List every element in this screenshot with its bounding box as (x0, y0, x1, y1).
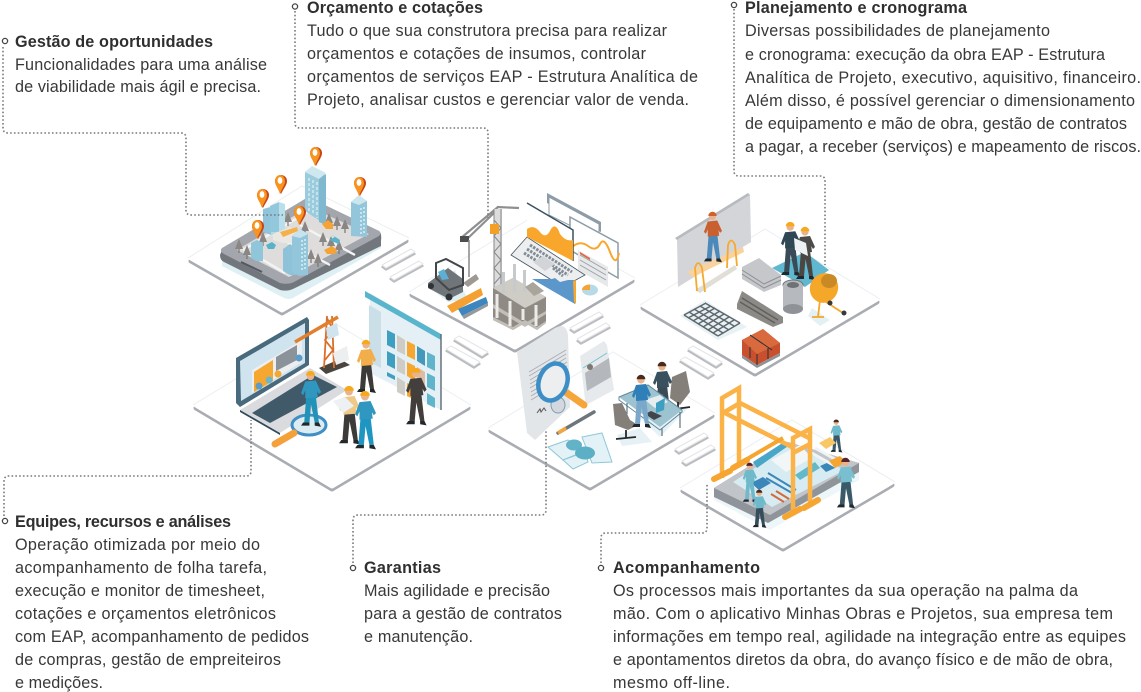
text block: acompanhamento: informações em tempo real, agilidade na integração entre as equipes (613, 628, 1126, 646)
connector: orçamento e cotações (292, 4, 488, 218)
text block: equipes, recursos e análises: com EAP, acompanhamento de pedidos (15, 628, 309, 646)
illustration: laptop, crane, calendar and workers (236, 291, 441, 449)
platform: gestão de oportunidades (188, 186, 409, 313)
text block: planejamento e cronograma: Diversas possibilidades de planejamento (745, 22, 1050, 40)
platform: acompanhamento (680, 420, 895, 549)
heading: garantias: Garantias (364, 559, 441, 577)
text block: garantias: Mais agilidade e precisão (364, 582, 550, 600)
text block: orçamento e cotações: Tudo o que sua construtora precisa para realizar (307, 22, 668, 40)
connector: garantias (350, 430, 546, 571)
illustration: phone with gantry and people (714, 388, 859, 530)
text block: acompanhamento: mesmo off-line. (613, 674, 730, 692)
text block: gestão de oportunidades (15, 33, 267, 96)
platform: orçamento e cotações (409, 219, 635, 350)
text block: planejamento e cronograma: de equipamento e mão de obra, gestão de contratos (745, 115, 1127, 133)
text block: planejamento e cronograma: e cronograma: execução da obra EAP - Estrutura (745, 46, 1105, 64)
platform: planejamento e cronograma (640, 229, 880, 374)
connector tabs between platforms (382, 249, 722, 466)
text block: acompanhamento: e apontamentos diretos da obra, do avanço físico e de mão de obra, (613, 651, 1113, 669)
heading: gestão de oportunidades: Gestão de oportunidades (15, 33, 213, 51)
text block: equipes, recursos e análises: execução e monitor de timesheet, (15, 582, 265, 600)
connector: gestão de oportunidades (2, 38, 283, 215)
text block: acompanhamento (613, 559, 1126, 692)
text block: equipes, recursos e análises: acompanhamento de folha tarefa, (15, 559, 267, 577)
text block: planejamento e cronograma (745, 0, 1141, 156)
text block: equipes, recursos e análises: de compras, gestão de empreiteiros (15, 651, 281, 669)
text block: gestão de oportunidades: de viabilidade mais ágil e precisa. (15, 78, 261, 96)
text block: planejamento e cronograma: Além disso, é possível gerenciar o dimensionamento (745, 92, 1135, 110)
text block: equipes, recursos e análises: Operação otimizada por meio do (15, 536, 260, 554)
heading: equipes, recursos e análises: Equipes, recursos e análises (15, 513, 231, 531)
connector: acompanhamento (598, 484, 707, 571)
illustration: materials and engineers (675, 193, 846, 368)
illustration: crane, forklift, charts (428, 193, 619, 330)
text block: garantias: para a gestão de contratos (364, 605, 562, 623)
text block: garantias (364, 559, 562, 646)
text block: equipes, recursos e análises: cotações e orçamentos eletrônicos (15, 605, 276, 623)
text block: orçamento e cotações: orçamentos e cotações de insumos, controlar (307, 45, 647, 63)
text block: gestão de oportunidades: Funcionalidades para uma análise (15, 56, 267, 74)
illustration: tablet city (220, 147, 381, 299)
text block: equipes, recursos e análises: e medições. (15, 674, 103, 692)
connector: planejamento e cronograma (731, 2, 825, 265)
text block: planejamento e cronograma: Analítica de Projeto, executivo, aquisitivo, financeiro. (745, 69, 1141, 87)
heading: acompanhamento: Acompanhamento (613, 559, 760, 577)
text block: orçamento e cotações: Projeto, analisar custos e gerenciar valor de venda. (307, 91, 689, 109)
text block: orçamento e cotações: orçamentos de serviços EAP - Estrutura Analítica de (307, 68, 698, 86)
connector: equipes, recursos e análises (2, 420, 251, 524)
text block: orçamento e cotações (307, 0, 698, 109)
text block: acompanhamento: Os processos mais importantes da sua operação na palma da (613, 582, 1078, 600)
platform: equipes, recursos e análises (193, 321, 471, 489)
illustration: contract, handshake and money (517, 326, 690, 469)
text block: acompanhamento: mão. Com o aplicativo Minhas Obras e Projetos, sua empresa tem (613, 605, 1113, 623)
platform: garantias (488, 352, 715, 488)
text block: planejamento e cronograma: a pagar, a receber (serviços) e mapeamento de riscos. (745, 138, 1141, 156)
text block: equipes, recursos e análises (15, 513, 309, 692)
text block: garantias: e manutenção. (364, 628, 473, 646)
